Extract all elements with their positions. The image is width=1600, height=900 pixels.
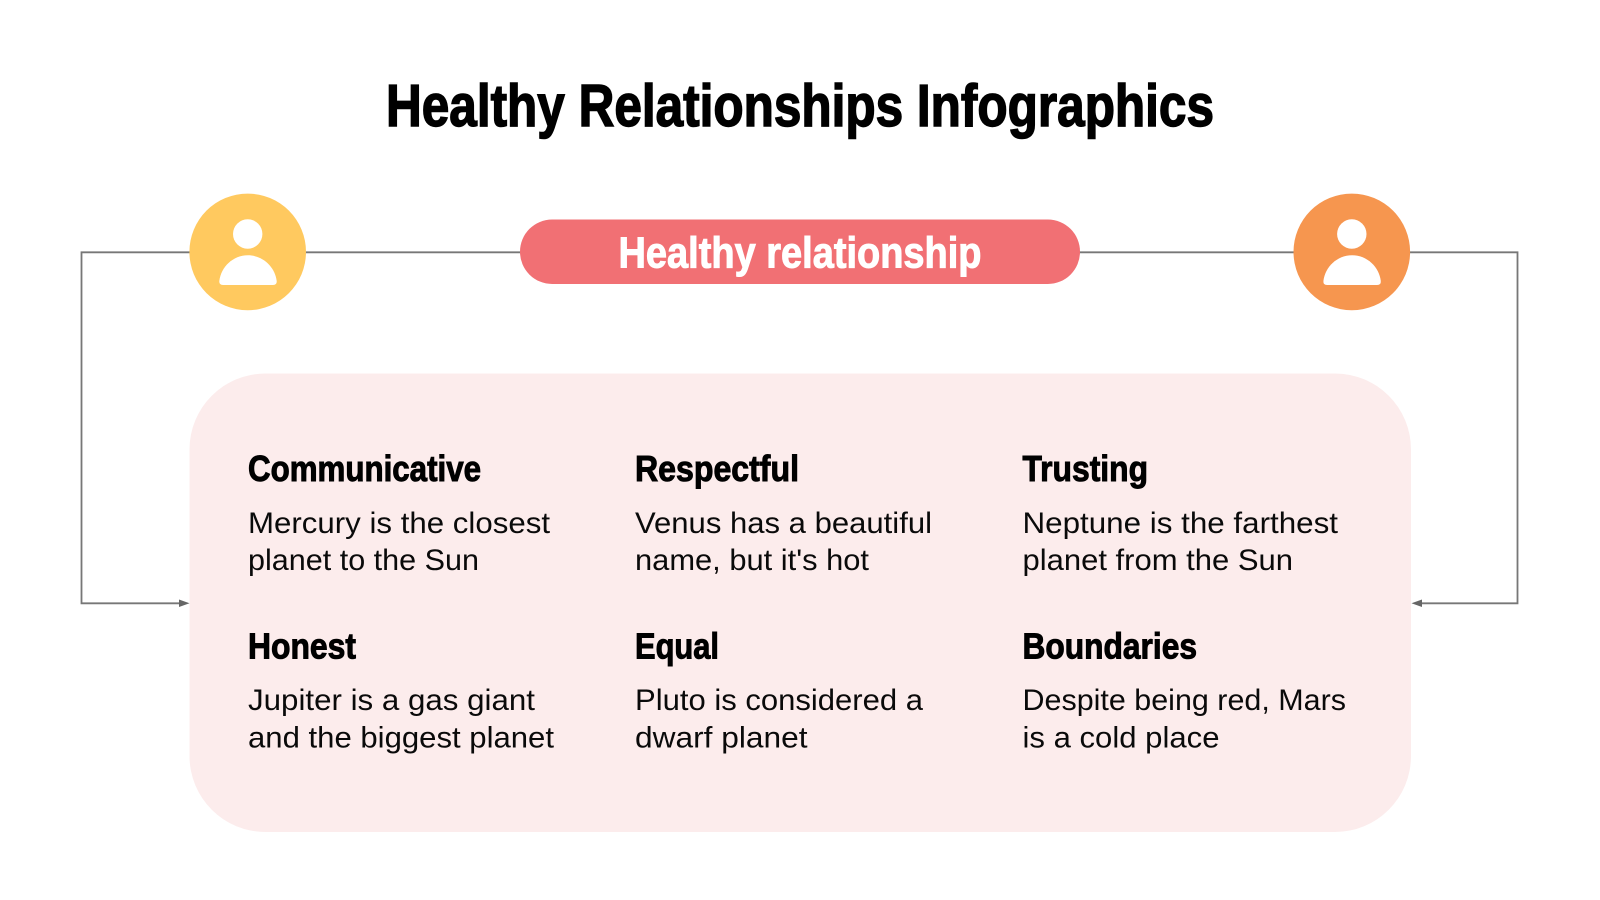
icon: left person: [189, 194, 306, 310]
arrow: right person to panel: [1079, 252, 1518, 607]
item: communicative: Mercury is the closest: [248, 507, 550, 540]
item: trusting: [1022, 448, 1338, 577]
item: honest: Jupiter is a gas giant: [248, 684, 535, 717]
item: boundaries: Despite being red, Mars: [1022, 684, 1346, 717]
item: equal: Equal: [635, 626, 719, 666]
item: equal: [635, 626, 924, 754]
item: respectful: [635, 448, 932, 577]
item: equal: Pluto is considered a: [635, 684, 924, 717]
title: Healthy Relationships Infographics: [386, 72, 1214, 139]
item: trusting: planet from the Sun: [1022, 544, 1293, 577]
banner: healthy relationship: [520, 220, 1080, 284]
item: boundaries: [1022, 626, 1346, 754]
item: respectful: name, but it's hot: [635, 544, 869, 577]
banner: healthy relationship: Healthy relationship: [618, 228, 982, 278]
panel: qualities: [190, 374, 1411, 832]
item: respectful: Venus has a beautiful: [635, 507, 932, 540]
item: honest: and the biggest planet: [248, 722, 554, 754]
item: respectful: Respectful: [635, 448, 799, 489]
item: trusting: Trusting: [1022, 448, 1148, 489]
item: communicative: [248, 448, 550, 577]
arrow: left person to panel: [82, 252, 520, 607]
icon: right person: [1294, 194, 1410, 310]
item: trusting: Neptune is the farthest: [1022, 507, 1338, 540]
item: boundaries: Boundaries: [1022, 626, 1197, 666]
item: boundaries: is a cold place: [1022, 722, 1220, 754]
item: equal: dwarf planet: [635, 722, 808, 754]
item: communicative: planet to the Sun: [248, 544, 479, 577]
item: honest: [248, 626, 554, 754]
item: honest: Honest: [248, 626, 356, 666]
item: communicative: Communicative: [248, 448, 481, 489]
